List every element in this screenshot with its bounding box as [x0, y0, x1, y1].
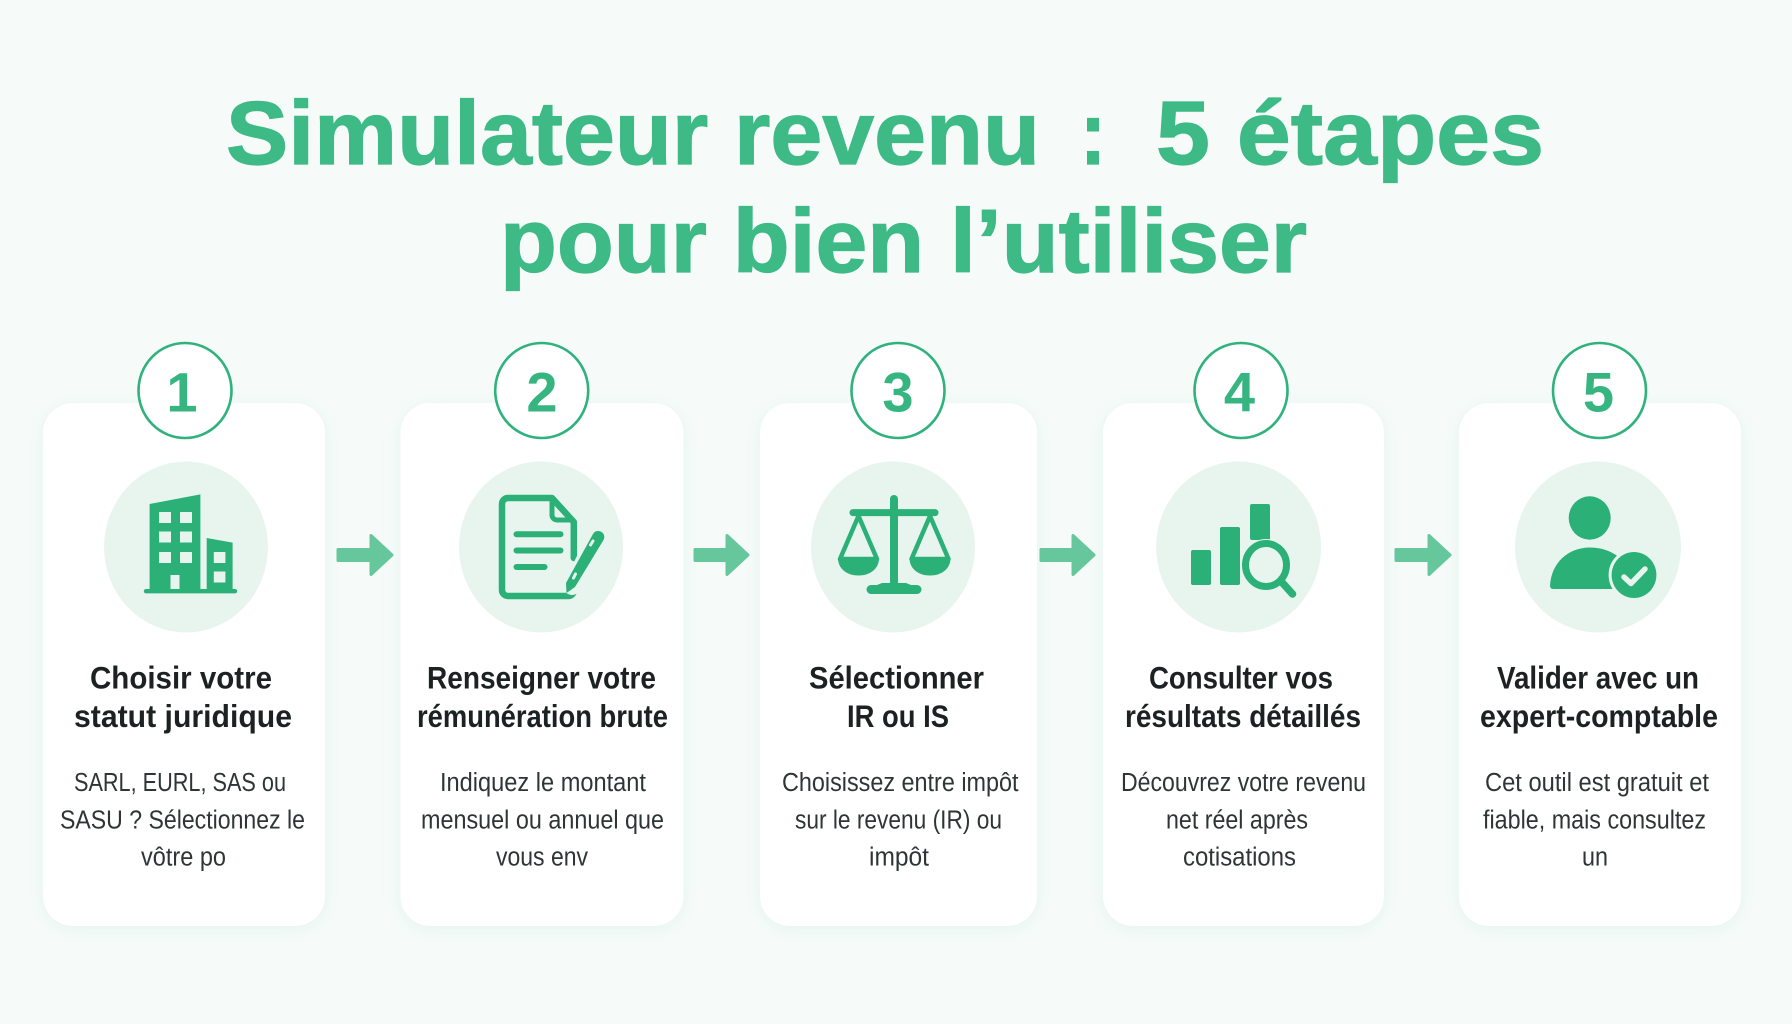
panel: step 5 [1459, 343, 1741, 926]
step number 4 [1194, 343, 1288, 438]
step number 2 [495, 343, 588, 438]
icon: scales [811, 462, 975, 632]
title: : [1080, 84, 1106, 184]
card background [43, 403, 325, 926]
step description [782, 769, 1018, 872]
step number 5: 5 [1583, 360, 1614, 424]
step heading: Valider avec un [1497, 660, 1699, 696]
panel: step 4 [1103, 343, 1384, 926]
step heading [74, 660, 292, 734]
step description: Choisissez entre impôt [782, 769, 1018, 797]
step heading: Sélectionner [809, 660, 984, 696]
arrow 1 to 2 [338, 536, 392, 574]
step heading: expert-comptable [1480, 698, 1718, 734]
step number 5 [1553, 343, 1646, 438]
step number 3: 3 [882, 360, 914, 424]
title: Simulateur revenu [226, 84, 1040, 184]
title: pour bien l’utiliser [500, 192, 1307, 292]
step heading: résultats détaillés [1125, 698, 1361, 734]
panel: step 3 [760, 343, 1037, 926]
step description: impôt [869, 844, 929, 872]
step heading [809, 660, 984, 734]
step heading: Choisir votre [90, 660, 272, 696]
icon: bar chart with magnifier [1156, 462, 1321, 632]
step description: un [1582, 844, 1608, 872]
step number 2: 2 [526, 360, 558, 424]
arrow 3 to 4 [1041, 536, 1094, 574]
step description: vous env [496, 844, 588, 872]
panel: step 2 [400, 343, 684, 926]
step heading [417, 660, 668, 734]
step description [1483, 769, 1709, 872]
step description: SARL, EURL, SAS ou [74, 769, 286, 797]
step description: Indiquez le montant [440, 769, 646, 797]
panel: step 1 [43, 343, 325, 926]
title: 5 étapes [1156, 84, 1544, 184]
card background [1103, 403, 1384, 926]
step description [1121, 769, 1366, 872]
step description: Cet outil est gratuit et [1485, 769, 1709, 797]
arrow 4 to 5 [1396, 536, 1450, 574]
step number 3 [852, 343, 944, 438]
step heading: statut juridique [74, 698, 292, 734]
card background [1459, 403, 1741, 926]
step heading: rémunération brute [417, 698, 668, 734]
step description: sur le revenu (IR) ou [795, 806, 1002, 834]
step description: mensuel ou annuel que [421, 806, 664, 834]
icon: document and pen [459, 462, 623, 632]
title [226, 84, 1544, 292]
arrow 2 to 3 [695, 536, 748, 574]
step description [421, 769, 664, 872]
card background [400, 403, 684, 926]
step heading [1125, 660, 1361, 734]
step description: net réel après [1166, 806, 1308, 834]
step description: vôtre po [141, 844, 226, 872]
card background [760, 403, 1037, 926]
step heading [1480, 660, 1718, 734]
step description [60, 769, 305, 872]
step description: SASU ? Sélectionnez le [60, 806, 305, 834]
step description: fiable, mais consultez [1483, 806, 1706, 834]
step description: cotisations [1183, 844, 1296, 872]
step heading: Renseigner votre [427, 660, 656, 696]
step description: Découvrez votre revenu [1121, 769, 1366, 797]
icon: person with check badge [1515, 462, 1681, 632]
icon: building [104, 462, 268, 632]
step number 1: 1 [166, 360, 198, 424]
step number 4: 4 [1224, 360, 1255, 424]
step heading: IR ou IS [847, 698, 949, 734]
step number 1 [138, 343, 232, 438]
step heading: Consulter vos [1149, 660, 1333, 696]
